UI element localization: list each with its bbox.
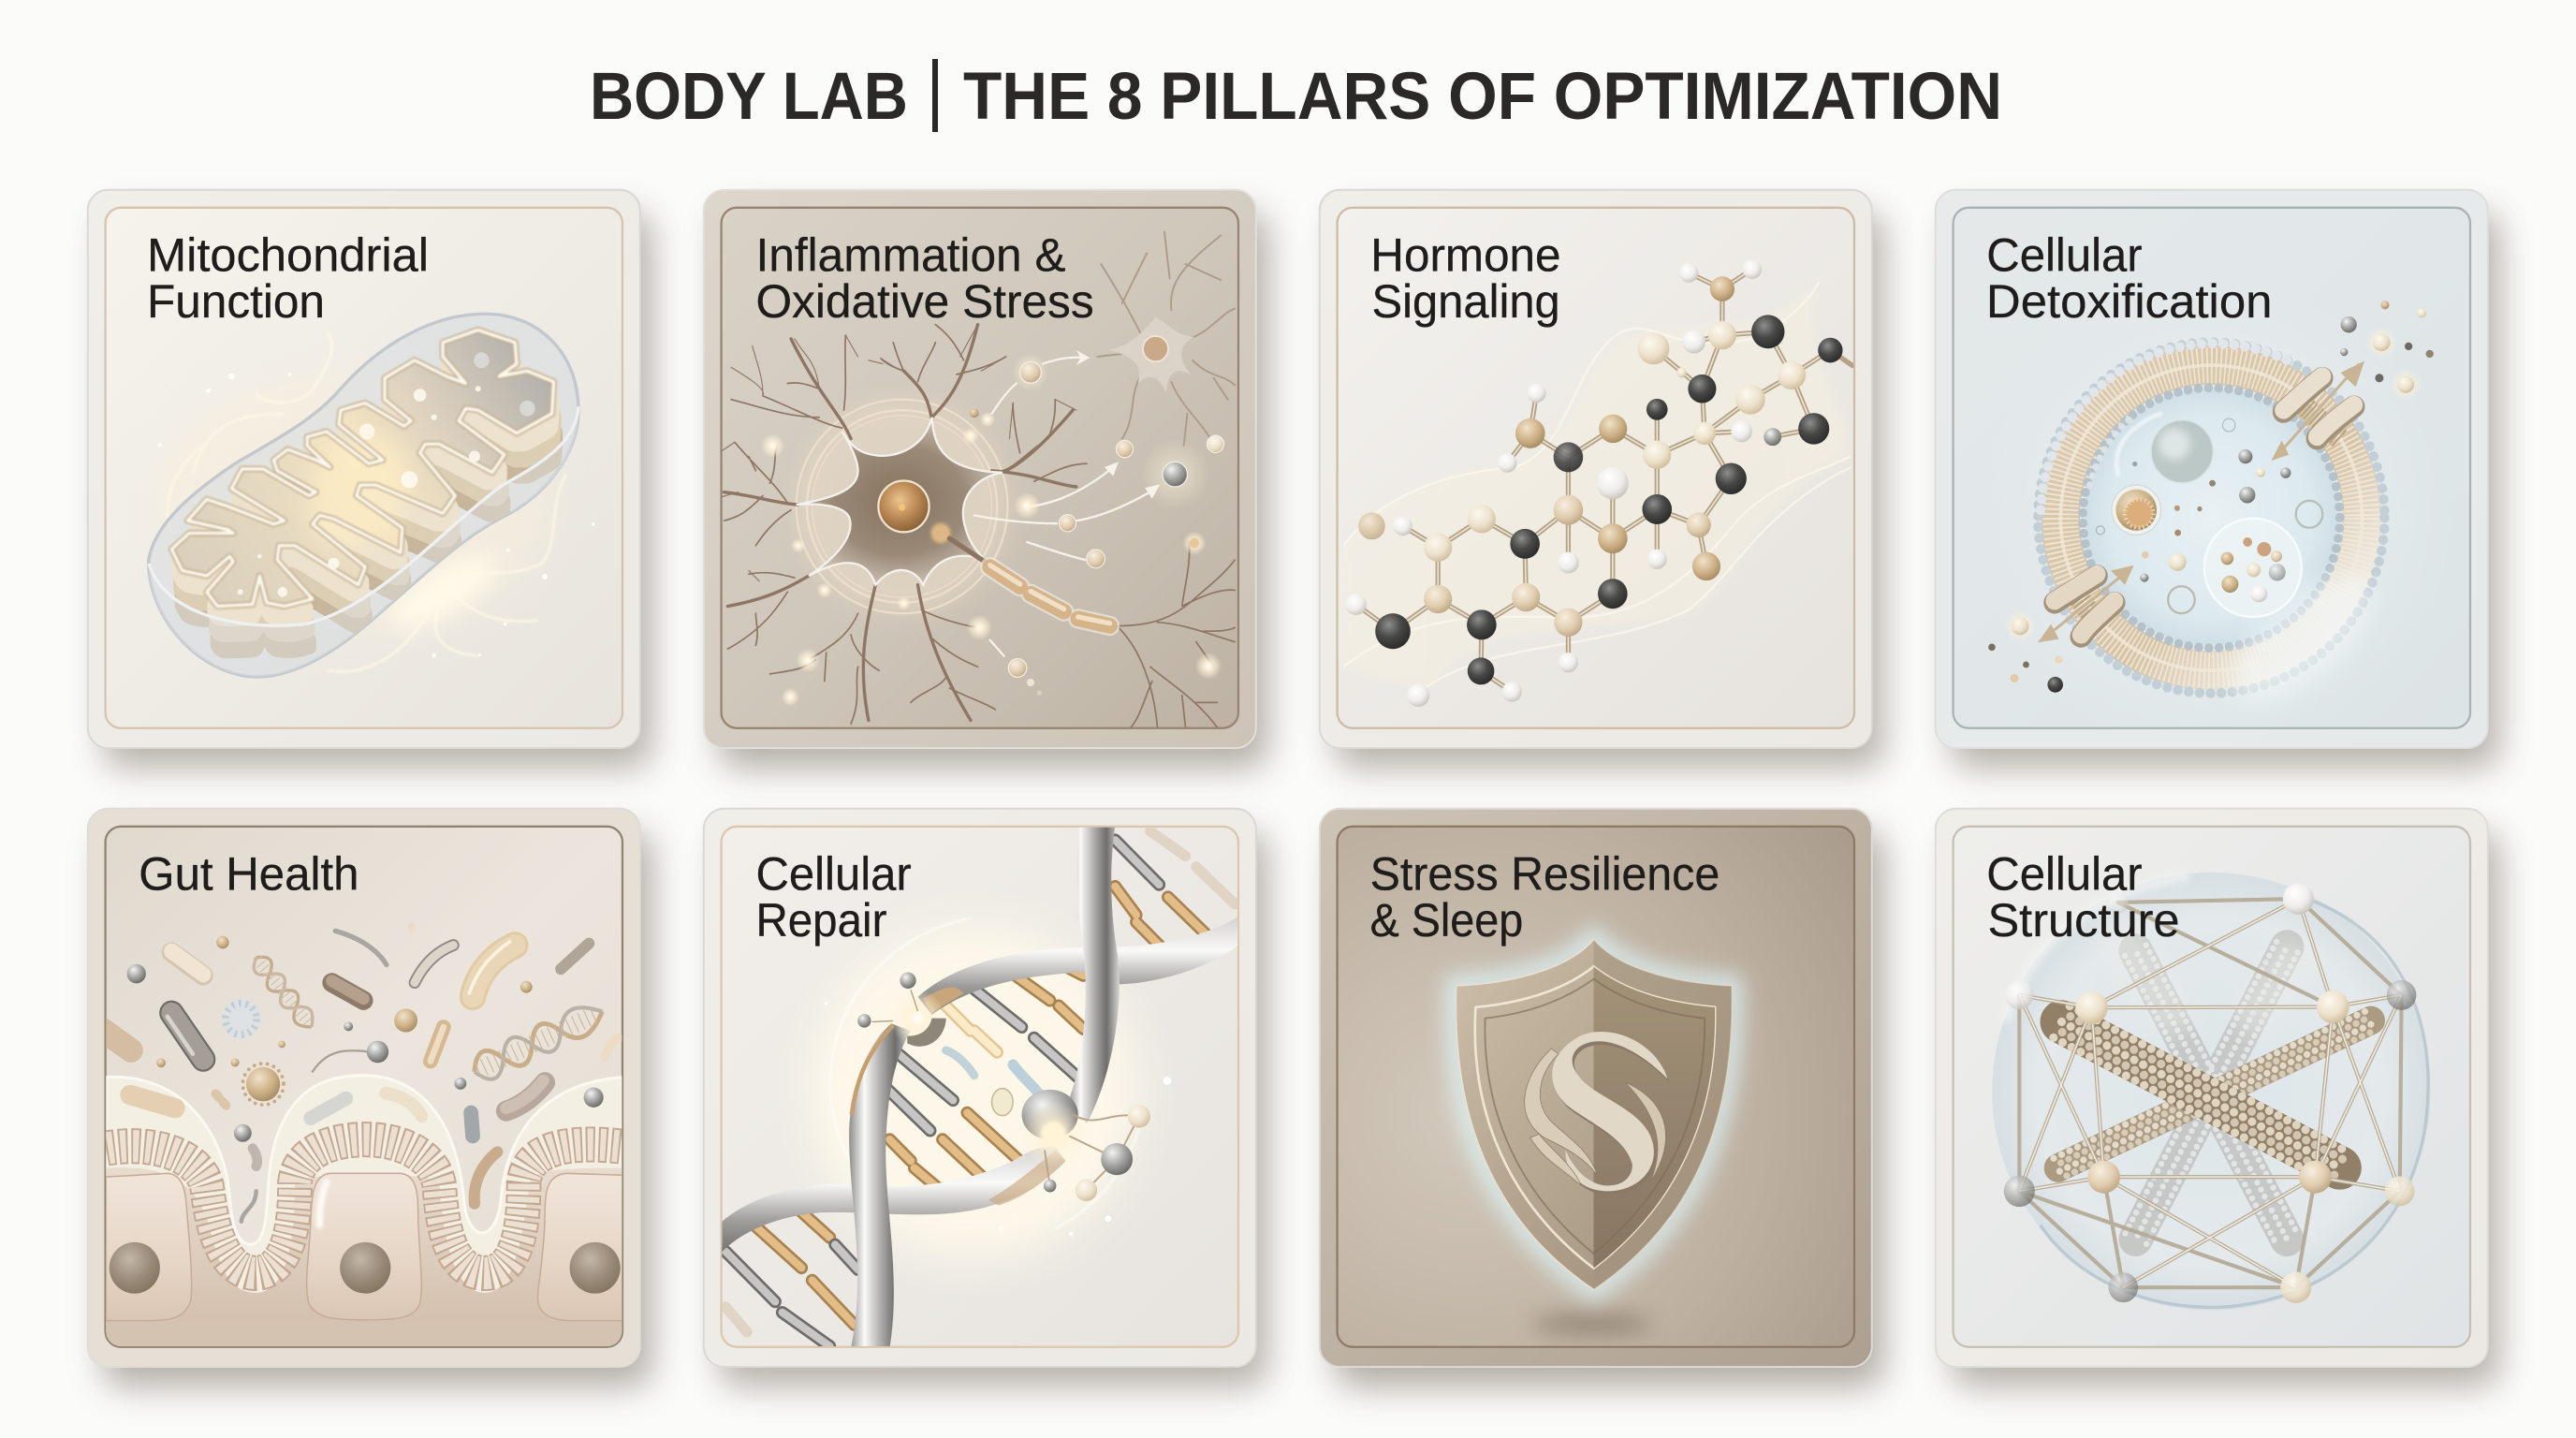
second neuron [1097, 232, 1235, 446]
soma [797, 418, 1003, 585]
heading: hormone signaling: Signaling [1371, 275, 1560, 328]
bonds [1356, 270, 1852, 692]
panel: gut health [88, 809, 652, 1387]
microbes [101, 931, 619, 1222]
heading: cellular repair: Repair [755, 894, 886, 946]
helical strands [1067, 828, 1120, 1123]
illustration: neuron network [713, 232, 1235, 727]
lattice nodes [2004, 883, 2416, 1303]
S emblem [1525, 1032, 1670, 1195]
dna fragment large [468, 998, 608, 1085]
illustration: cell membrane [1977, 278, 2456, 763]
heading: mitochondrial function: Function [147, 275, 325, 328]
grey microtubules behind [2125, 942, 2298, 1244]
upper channel protein [2271, 361, 2364, 461]
rungs [725, 831, 1235, 1346]
heading: hormone signaling [1370, 228, 1561, 328]
panel: cellular detoxification [1936, 190, 2500, 769]
free radicals [761, 354, 1224, 707]
illustration: dna repair helix [722, 828, 1238, 1348]
dendrites [713, 325, 1235, 727]
heading: cellular detoxification [1986, 228, 2272, 328]
illustration: gut lining and microbiome [101, 922, 622, 1350]
heading: inflammation and oxidative stress [755, 228, 1094, 328]
illustration: mitochondrion [149, 314, 595, 677]
heading: gut health: Gut Health [139, 847, 359, 901]
title: THE 8 PILLARS OF OPTIMIZATION [963, 60, 2002, 134]
heading: stress resilience and sleep: Stress Resilience [1370, 847, 1720, 901]
heading: cellular detoxification: Cellular [1986, 228, 2143, 282]
heading: cellular repair: Cellular [755, 847, 912, 901]
title: BODY LAB [590, 60, 908, 134]
axon [949, 538, 1110, 625]
heading: cellular detoxification: Detoxification [1986, 275, 2272, 328]
villi [106, 1139, 622, 1273]
heading: cellular structure: Structure [1987, 894, 2180, 946]
illustration: hormone molecule [1340, 259, 1852, 707]
heading: stress resilience and sleep [1370, 847, 1720, 946]
heading: cellular structure [1986, 847, 2180, 946]
illustration: shield emblem [1456, 940, 1732, 1335]
expelled particles [1988, 301, 2434, 693]
dna fragment small [249, 951, 319, 1033]
lateral backbones [722, 1147, 1066, 1252]
heading: cellular structure: Cellular [1986, 847, 2143, 901]
panel: mitochondrial function [88, 190, 652, 769]
heading: mitochondrial function: Mitochondrial [147, 228, 429, 282]
illustration: cytoskeleton lattice in sphere [1993, 873, 2430, 1310]
repair sites [825, 973, 1171, 1236]
epithelial cells [106, 1173, 622, 1321]
atoms [1345, 259, 1843, 707]
heading: hormone signaling: Hormone [1370, 228, 1561, 282]
heading: inflammation and oxidative stress: Oxidative Stress [755, 275, 1094, 328]
heading: inflammation and oxidative stress: Inflammation & [755, 228, 1066, 282]
matrix granules [238, 352, 535, 597]
tan filament 1 [2054, 1006, 2348, 1183]
organelles [2096, 414, 2322, 617]
tan filament 2 [2054, 1011, 2376, 1178]
panel: cellular repair [704, 809, 1268, 1387]
heading: stress resilience and sleep: & Sleep [1370, 894, 1523, 946]
panel: inflammation and oxidative stress [704, 190, 1268, 769]
lower channel protein [2038, 565, 2134, 642]
signal arrows [974, 358, 1156, 656]
lattice struts [2019, 899, 2402, 1287]
panel: cellular structure [1936, 809, 2500, 1387]
mucus layer [106, 1076, 622, 1350]
panel: hormone signaling [1320, 190, 1884, 769]
heading: cellular repair [755, 847, 912, 946]
panel: stress resilience and sleep [1320, 809, 1884, 1387]
heading: mitochondrial function [147, 228, 429, 328]
